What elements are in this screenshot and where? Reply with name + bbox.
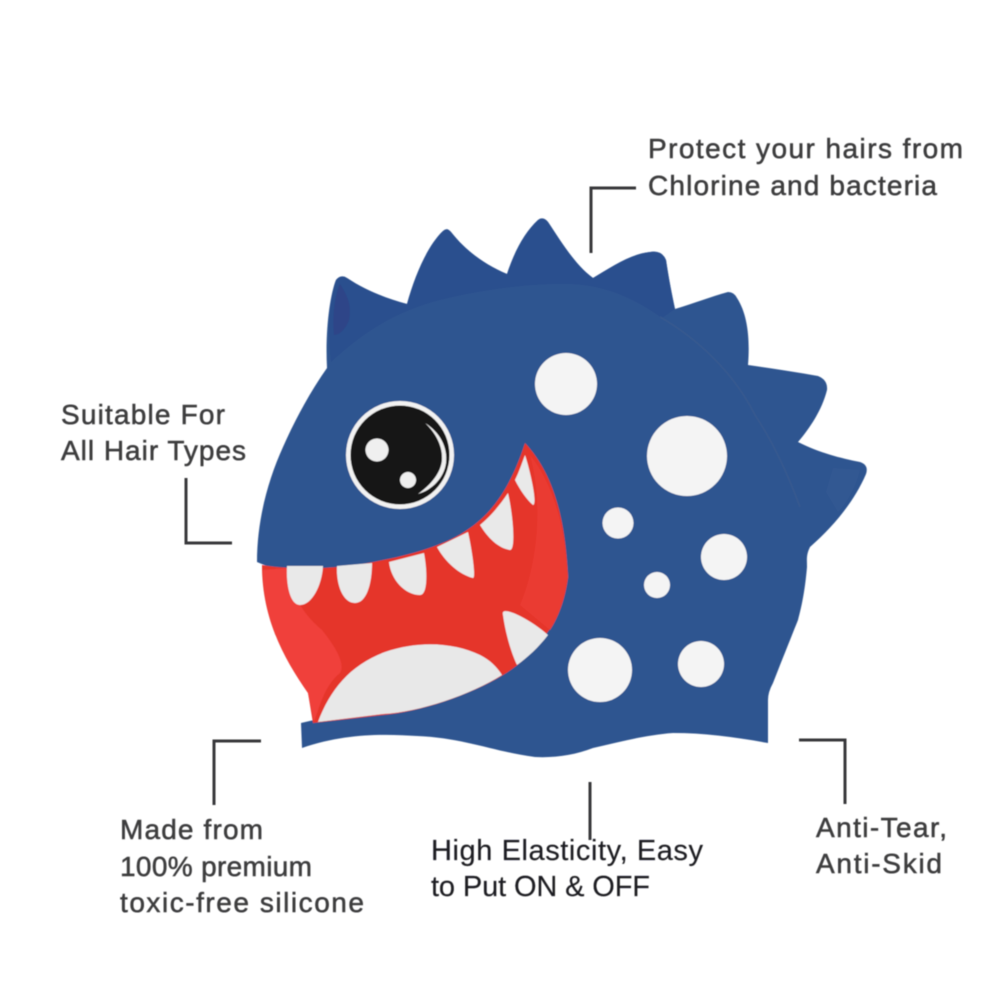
- callout: silicone material: 100% premium: [120, 851, 312, 882]
- callout: hair types: [61, 399, 246, 543]
- callout: chlorine protection: Protect your hairs from: [648, 133, 963, 164]
- callout: chlorine protection: Chlorine and bacteria: [648, 170, 937, 201]
- lower right fin highlight: [826, 468, 860, 512]
- white spots: [535, 353, 747, 702]
- callout: anti-tear: [799, 740, 947, 879]
- callout: anti-tear: Anti-Skid: [816, 848, 942, 879]
- upper teeth: [287, 455, 548, 665]
- callout: silicone material: Made from: [120, 814, 263, 845]
- callout: hair types: All Hair Types: [61, 435, 246, 466]
- mouth: [262, 443, 568, 723]
- mouth highlight left: [263, 568, 342, 722]
- cap body silhouette with spikes: [257, 218, 867, 757]
- lower jaw tooth: [318, 644, 502, 722]
- callout: high elasticity: [431, 782, 704, 903]
- illustration: dinosaur swim cap: [257, 218, 867, 757]
- eye: [346, 401, 454, 509]
- cap seam highlight: [660, 317, 800, 507]
- lower right tooth: [503, 611, 548, 665]
- callout: silicone material: [120, 741, 364, 918]
- callout: high elasticity: High Elasticity, Easy: [431, 835, 704, 867]
- callout: anti-tear: Anti-Tear,: [816, 812, 947, 843]
- callout: chlorine protection: [591, 133, 963, 253]
- callout: hair types: Suitable For: [61, 399, 225, 430]
- callout: silicone material: toxic-free silicone: [120, 887, 364, 918]
- spike shading: [329, 218, 675, 362]
- mouth highlight right: [520, 455, 568, 630]
- darker left spike shadow: [333, 284, 350, 335]
- callout: high elasticity: to Put ON & OFF: [431, 871, 650, 903]
- callouts: [61, 133, 963, 918]
